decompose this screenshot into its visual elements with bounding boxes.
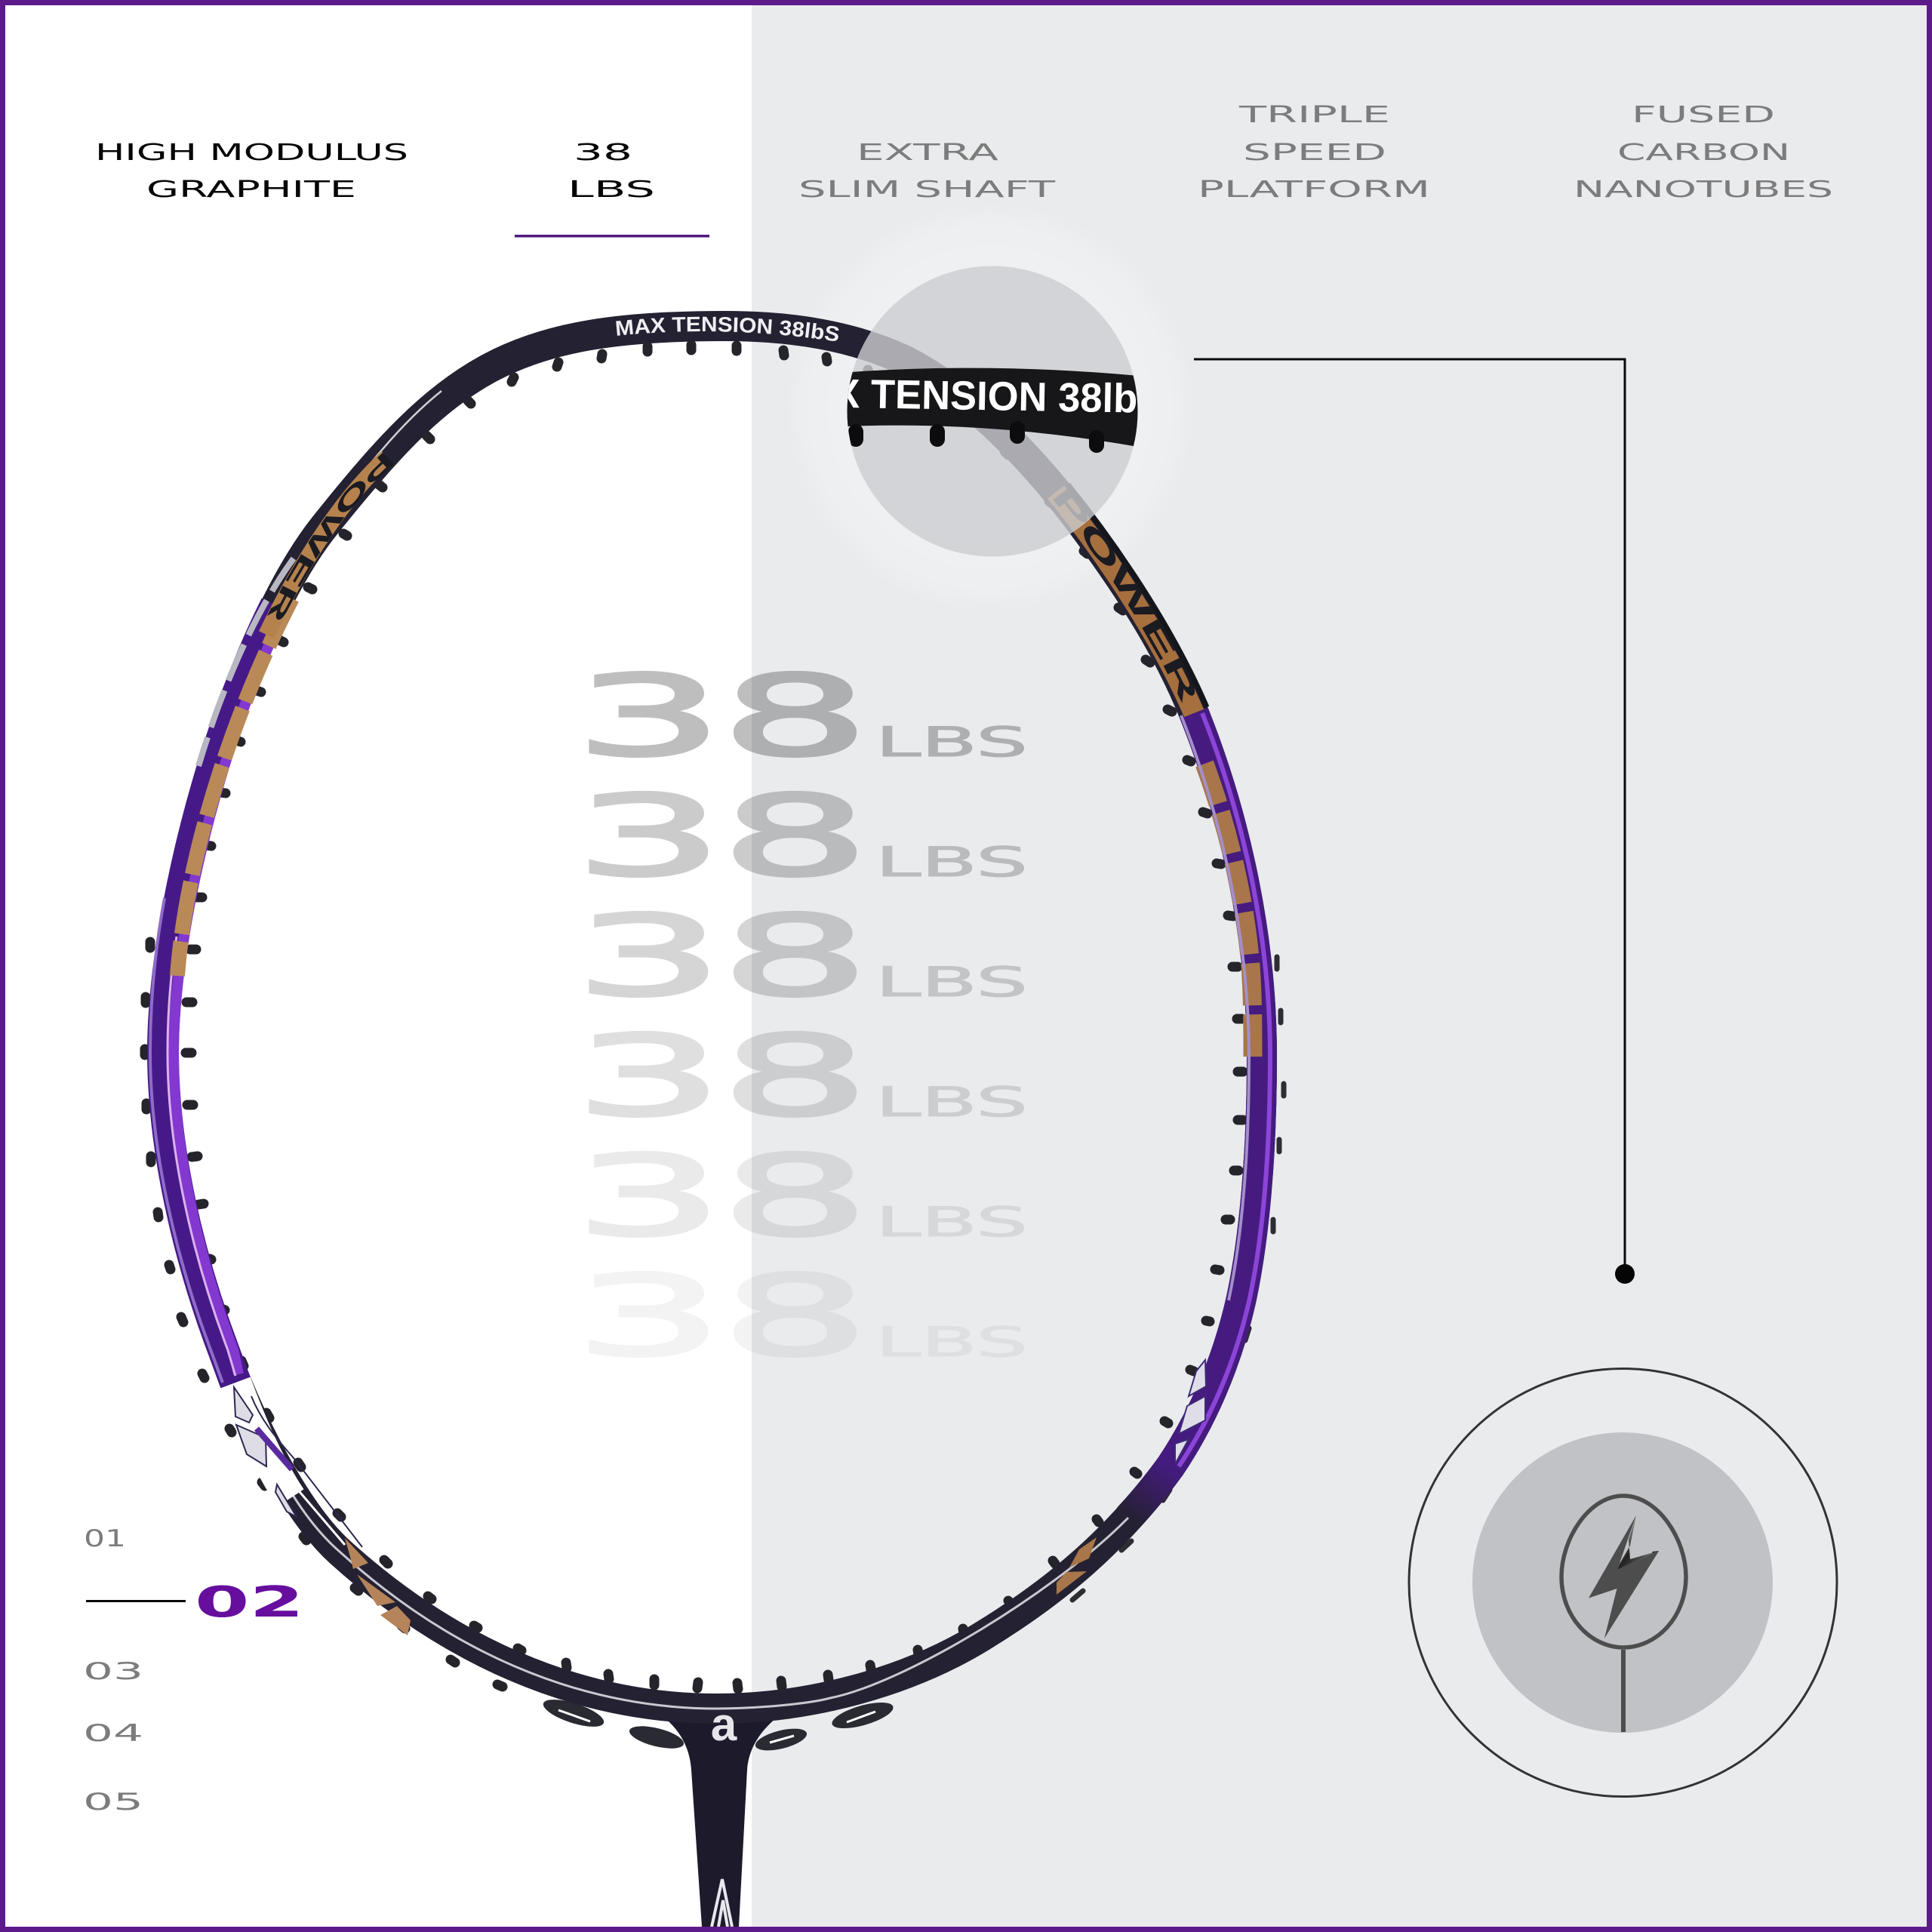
background: grey right panel: [752, 0, 1932, 1932]
inner disc: [1472, 1432, 1773, 1733]
tab 04: triple speed platform: PLATFORM: [1198, 177, 1430, 203]
step 03: 03: [83, 1658, 143, 1685]
step index: [83, 1525, 304, 1816]
left copper hatch: [177, 598, 292, 976]
38 LBS row 4: LBS: [875, 1078, 1028, 1126]
frame bottom highlight: [275, 1464, 1128, 1709]
38 LBS row 3: [574, 892, 1028, 1021]
POWER lettering left: POWER: [267, 453, 394, 620]
frame base: [163, 326, 1262, 1709]
38 LBS row 3: LBS: [875, 958, 1028, 1006]
tab 01: high modulus graphite: GRAPHITE: [146, 177, 356, 203]
right purple section: [1171, 713, 1262, 1466]
38 LBS row 6: 8: [721, 1252, 869, 1381]
right copper section: [1056, 492, 1195, 715]
shaft chevron: [712, 1879, 732, 1927]
38 LBS row 2: LBS: [875, 838, 1028, 886]
38 LBS row 4: 8: [721, 1012, 869, 1141]
background: white left panel: [0, 0, 752, 1932]
magnified grommets: [856, 429, 1097, 445]
step 04: 04: [83, 1720, 143, 1747]
step 02 active: 02: [195, 1578, 304, 1627]
right purple fade into dark: [1128, 1466, 1171, 1518]
right inner pale edge: [1181, 715, 1249, 1300]
band: [847, 368, 1138, 446]
POWER lettering right: POWER: [1054, 489, 1195, 703]
tab 01: high modulus graphite: HIGH MODULUS: [95, 140, 408, 166]
lightning bolt: [1589, 1515, 1659, 1638]
magnified frame band: [830, 368, 1155, 450]
38 LBS row 6: LBS: [875, 1318, 1028, 1366]
feature tabs: [95, 102, 1833, 237]
step 01: 01: [84, 1525, 126, 1552]
38 LBS row 3: 3: [574, 892, 724, 1021]
outer ring: [1409, 1369, 1837, 1796]
tab 02: 38 lbs: LBS: [568, 177, 655, 203]
tab 02: 38 lbs: [568, 140, 655, 203]
string grommets: [145, 345, 1243, 1689]
frame lettering: MAX TENSION 38lbS: MAX TENSION 38lbS: [616, 317, 839, 341]
38 LBS row 5: 3: [574, 1132, 724, 1261]
magnifier lens: [847, 266, 1138, 557]
right outer thin grommets: [1072, 957, 1284, 1600]
active step rule: [86, 1600, 186, 1602]
magnifier halo: [785, 202, 1195, 613]
38 LBS row 1: 3: [574, 652, 724, 781]
38 LBS row 5: [574, 1132, 1028, 1261]
tab 01: high modulus graphite: [95, 140, 408, 203]
tab 04: triple speed platform: TRIPLE: [1238, 102, 1390, 128]
38 LBS row 4: [574, 1012, 1028, 1141]
badminton racket: [140, 311, 1286, 1927]
mini racket head: [1561, 1496, 1686, 1647]
callout leader line: [1194, 359, 1625, 1268]
bumper pads: [540, 1694, 896, 1755]
tab 02: 38 lbs: 38: [574, 140, 632, 166]
38 LBS row 1: 8: [721, 652, 869, 781]
upper frame highlight: [313, 391, 441, 540]
racket logo: a: [711, 1699, 737, 1751]
right black edge: [1068, 485, 1207, 707]
38 LBS row 1: LBS: [875, 718, 1028, 766]
racket icon badge: [1409, 1369, 1837, 1796]
38 LBS row 6: [574, 1252, 1028, 1381]
mini racket shaft: [1621, 1650, 1626, 1732]
38 LBS row 4: 3: [574, 1012, 724, 1141]
38 LBS row 5: 8: [721, 1132, 869, 1261]
38 LBS row 6: 3: [574, 1252, 724, 1381]
38 LBS row 2: 8: [721, 772, 869, 901]
38 LBS row 3: 8: [721, 892, 869, 1021]
tab 03: extra slim shaft: SLIM SHAFT: [798, 177, 1056, 203]
left grey flakes: [198, 558, 294, 766]
tab 04: triple speed platform: SPEED: [1243, 140, 1386, 166]
38 LBS row 2: [574, 772, 1028, 901]
active tab underline: [515, 235, 709, 237]
left bright inner band: [174, 608, 287, 1374]
tab 04: triple speed platform: [1198, 102, 1430, 203]
tab 05: fused carbon nanotubes: CARBON: [1617, 140, 1790, 166]
throat and shaft: [649, 1707, 792, 1927]
step 05: 05: [83, 1789, 143, 1816]
tab 05: fused carbon nanotubes: FUSED: [1632, 102, 1775, 128]
tab 05: fused carbon nanotubes: NANOTUBES: [1574, 177, 1833, 203]
tab 03: extra slim shaft: [798, 140, 1056, 203]
lens disc: [847, 266, 1138, 557]
right white diamonds: [1175, 1360, 1206, 1464]
repeated 38 LBS watermark stack: [574, 652, 1028, 1381]
tab 03: extra slim shaft: EXTRA: [857, 140, 999, 166]
callout end dot: [1615, 1264, 1635, 1284]
lower left copper patch: [345, 1538, 411, 1635]
38 LBS row 5: LBS: [875, 1198, 1028, 1246]
left purple section: [163, 605, 276, 1383]
left pale highlight: [168, 937, 235, 1376]
lower left white section: [234, 1383, 362, 1547]
tab 05: fused carbon nanotubes: [1574, 102, 1833, 203]
lower right copper patch: [1057, 1537, 1097, 1595]
magnified text: X TENSION 38lb: [833, 371, 1138, 422]
left outer pale edge: [150, 898, 223, 1383]
right copper hatch: [1204, 764, 1253, 1064]
38 LBS row 2: 3: [574, 772, 724, 901]
upper left copper section: [266, 457, 387, 635]
right bright edge: [1179, 713, 1270, 1466]
38 LBS row 1: [574, 652, 1028, 781]
